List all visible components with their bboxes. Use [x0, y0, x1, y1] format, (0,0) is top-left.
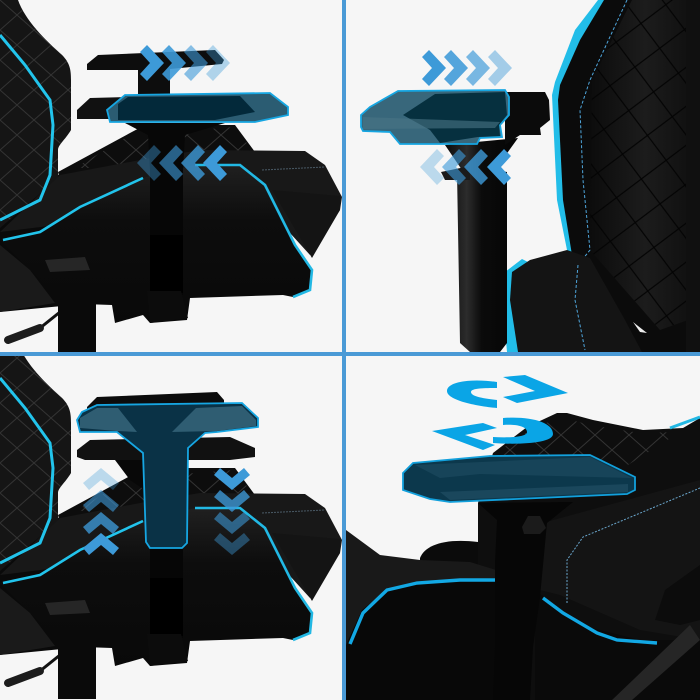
highlighted armrest pad — [361, 90, 509, 144]
highlighted armrest and column — [77, 403, 258, 548]
lower support — [115, 460, 144, 488]
seat back upholstery — [566, 488, 700, 603]
arrows: slide forward — [140, 45, 230, 81]
rotation arrows: top — [447, 375, 568, 408]
divider: vertical — [342, 0, 346, 700]
backrest and headrest — [478, 413, 700, 700]
upper armrest position — [87, 392, 224, 409]
panel: forward and back slide, side view — [0, 0, 342, 356]
armrest column — [478, 502, 573, 700]
panel: height adjustment — [0, 343, 342, 699]
arrows: raise — [83, 468, 119, 555]
panel: rotation adjustment — [346, 375, 700, 700]
chair side view — [0, 343, 342, 699]
armrest rear bracket — [505, 92, 550, 140]
divider: horizontal — [0, 352, 700, 356]
arrows: move outward — [422, 50, 512, 86]
panel: width adjustment, front view — [361, 0, 700, 352]
lower armrest position — [77, 437, 255, 460]
highlighted armrest pad — [107, 93, 288, 122]
armrest support — [125, 123, 225, 170]
caster wheel behind — [420, 541, 478, 565]
armrest pad highlighted — [403, 455, 635, 502]
armrest column — [441, 138, 518, 352]
lower right seat — [535, 590, 700, 700]
rear armrest pad — [77, 97, 122, 119]
arrows: move inward — [420, 149, 511, 185]
seat cushion — [502, 250, 642, 352]
rotation arrows: bottom — [432, 418, 553, 450]
arrows: slide back — [137, 145, 227, 181]
upper armrest position — [87, 50, 224, 95]
chair side view — [0, 0, 342, 356]
backrest — [552, 0, 700, 352]
left seat cushion — [346, 530, 496, 700]
arrows: lower — [214, 468, 250, 555]
